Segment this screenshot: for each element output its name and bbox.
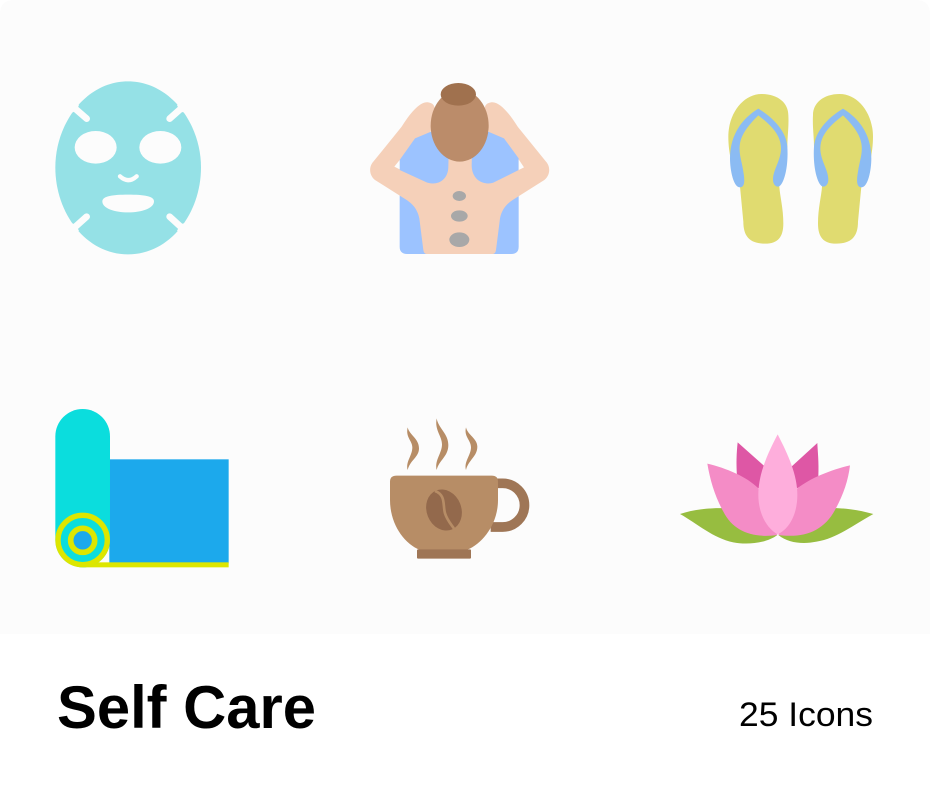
- icon: coffee cup: [390, 418, 524, 559]
- title: Self Care: [57, 674, 316, 741]
- icon: yoga mat: [55, 409, 229, 567]
- icon: flip flops: [728, 94, 873, 244]
- left flip flop: [728, 94, 788, 244]
- right flip flop: [813, 94, 873, 244]
- icon: hot stone massage: [370, 83, 549, 254]
- icon count label: 25 Icons: [739, 696, 873, 734]
- icon: lotus flower: [680, 434, 873, 544]
- icon: face mask: [55, 81, 201, 254]
